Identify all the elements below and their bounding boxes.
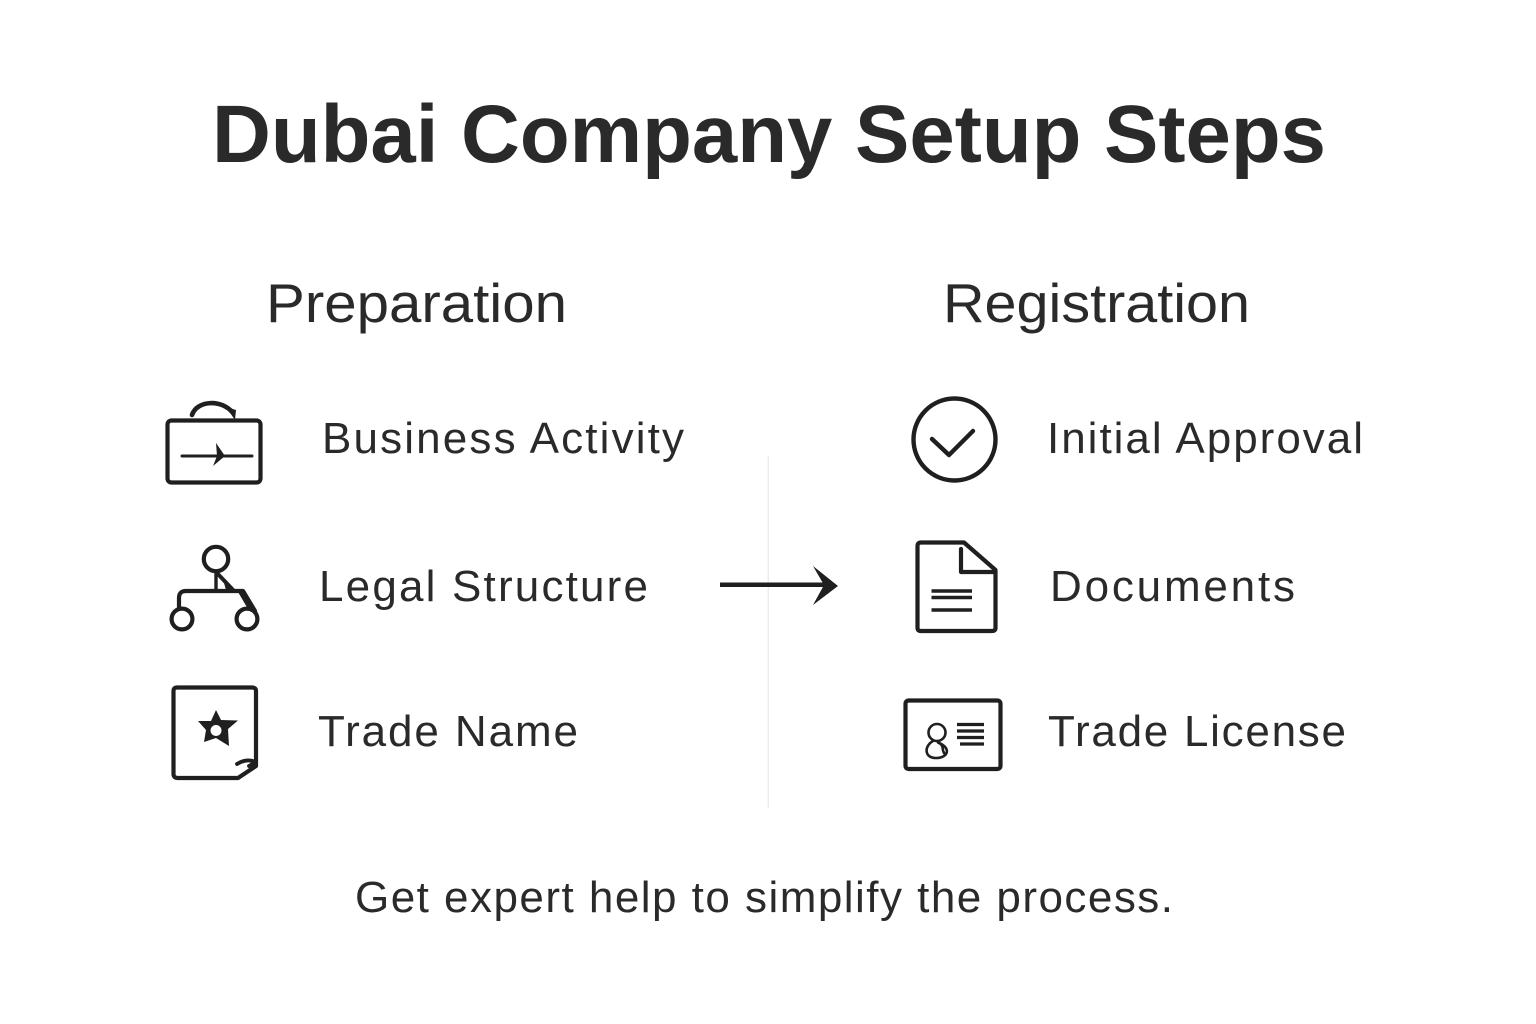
icon: trade license card bbox=[906, 700, 1000, 769]
divider line bbox=[768, 456, 769, 808]
icon: briefcase with arrow bbox=[168, 403, 260, 482]
label: documents: Documents bbox=[1050, 562, 1295, 611]
label: trade license: Trade License bbox=[1048, 707, 1346, 756]
arrow: preparation to registration bbox=[720, 566, 838, 605]
icon: trade name star page bbox=[174, 688, 256, 778]
title: Dubai Company Setup Steps bbox=[212, 89, 1326, 180]
label: trade name: Trade Name bbox=[318, 707, 578, 756]
label: business activity: Business Activity bbox=[322, 414, 684, 463]
icon: check circle bbox=[914, 398, 996, 480]
icon: document bbox=[918, 542, 996, 631]
label: legal structure: Legal Structure bbox=[319, 562, 648, 611]
panel: preparation bbox=[168, 272, 684, 778]
footer note: Get expert help to simplify the process. bbox=[355, 873, 1173, 922]
heading: registration: Registration bbox=[943, 272, 1250, 334]
heading: preparation: Preparation bbox=[266, 272, 567, 334]
icon: legal structure tree bbox=[172, 547, 257, 629]
label: initial approval: Initial Approval bbox=[1047, 414, 1363, 463]
panel: registration bbox=[906, 272, 1363, 769]
